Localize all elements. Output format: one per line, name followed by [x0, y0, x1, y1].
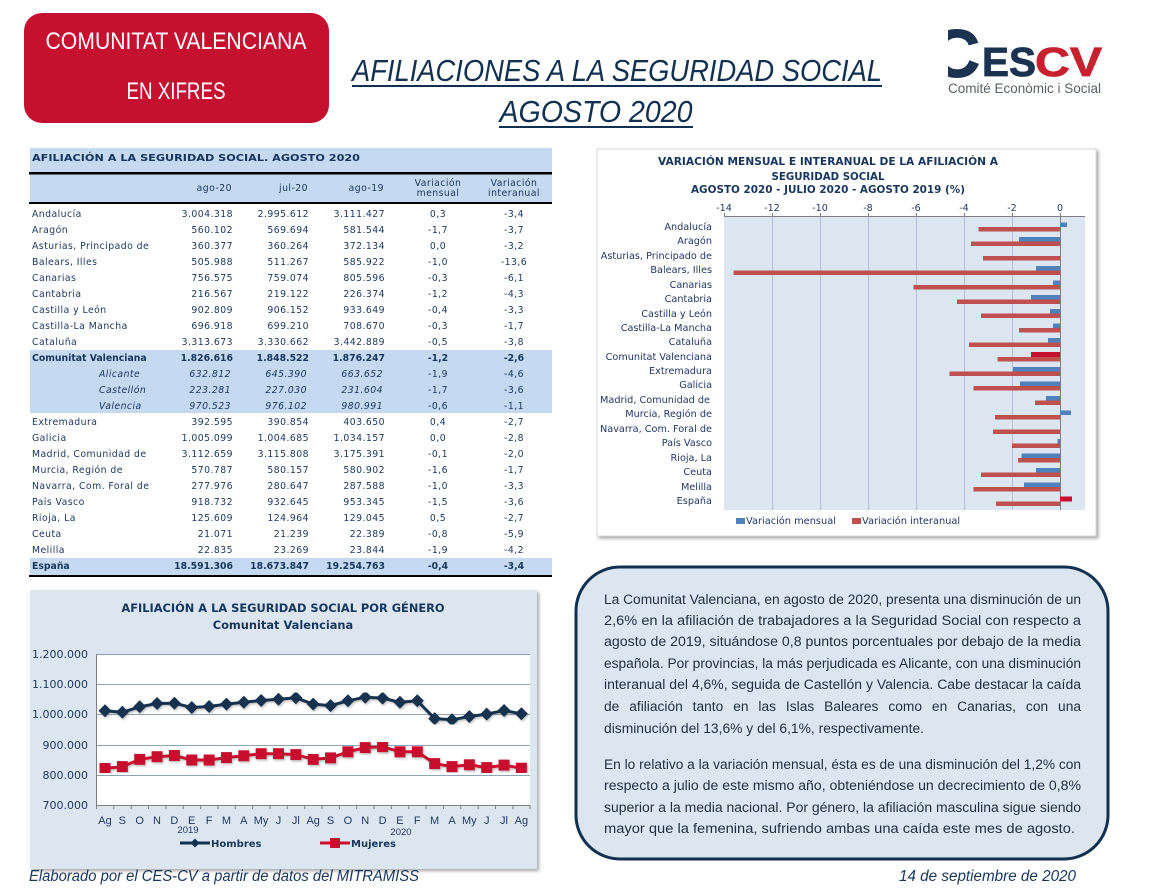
table rows: Alicante — [98, 369, 140, 380]
table rows: 280.647 — [267, 481, 309, 492]
bars: variación mensual — [1013, 222, 1071, 487]
table rows: 226.374 — [343, 289, 385, 300]
paragraph 2 — [604, 757, 1081, 836]
table rows: 1.876.247 — [333, 353, 385, 364]
table rows: España — [32, 561, 70, 572]
table rows: 125.609 — [191, 513, 233, 524]
x axis month labels: Jl — [292, 815, 300, 827]
x axis month labels: S — [327, 815, 334, 827]
paragraph 2: respecto a julio de este mismo año, obteniéndose un decrecimiento de 0,8% — [604, 778, 1081, 793]
table rows: 756.575 — [191, 273, 233, 284]
table rows: 390.854 — [267, 417, 309, 428]
table rows: 0,0 — [430, 433, 446, 444]
table rows: Aragón — [32, 225, 68, 236]
table rows: 372.134 — [343, 241, 385, 252]
table rows: Castellón — [99, 385, 146, 396]
table rows: -3,2 — [504, 241, 524, 252]
panel: line chart afiliación por género — [30, 590, 537, 869]
table rows: 1.004.685 — [258, 433, 309, 444]
table rows: 581.544 — [343, 225, 385, 236]
table rows: 3.112.659 — [182, 449, 233, 460]
table: afiliación por comunidad — [29, 148, 552, 577]
y axis labels — [32, 648, 88, 812]
category labels: Canarias — [670, 280, 712, 291]
table rows: 21.071 — [198, 529, 233, 540]
table rows: 906.152 — [267, 305, 309, 316]
table rows: 970.523 — [189, 401, 231, 412]
x axis month labels: M — [222, 815, 231, 827]
x axis month labels: My — [254, 815, 269, 827]
category labels: Cataluña — [669, 337, 712, 348]
bar chart legend: Variación interanual — [862, 515, 960, 527]
plot area and axis — [716, 203, 1085, 510]
table rows: 3.175.391 — [334, 449, 385, 460]
table rows: -1,6 — [428, 465, 448, 476]
table rows: 505.988 — [191, 257, 233, 268]
table rows: País Vasco — [32, 497, 85, 508]
x axis month labels: Ag — [306, 815, 320, 827]
bar chart title: AGOSTO 2020 - JULIO 2020 - AGOSTO 2019 (%) — [691, 184, 965, 196]
table rows: 124.964 — [267, 513, 309, 524]
table rows: 580.157 — [267, 465, 309, 476]
plot area and axis: -6 — [911, 203, 921, 214]
line: Hombres — [105, 697, 521, 720]
x axis month labels: F — [206, 815, 213, 827]
x axis month labels: E — [396, 815, 404, 827]
table rows: -1,9 — [428, 545, 448, 556]
table rows: -3,3 — [504, 481, 524, 492]
table rows: Cataluña — [32, 337, 77, 348]
category labels: País Vasco — [662, 437, 712, 449]
plot area and axis: -8 — [863, 203, 873, 214]
category labels: Castilla-La Mancha — [621, 323, 712, 334]
bar chart title: VARIACIÓN MENSUAL E INTERANUAL DE LA AFILIACIÓN A — [658, 155, 999, 168]
table rows: -2,7 — [504, 417, 524, 428]
table rows: 3.111.427 — [334, 209, 385, 220]
table rows: 360.377 — [191, 241, 233, 252]
title: AGOSTO 2020 — [498, 94, 692, 129]
table rows: 696.918 — [191, 321, 233, 332]
table rows: 976.102 — [265, 401, 307, 412]
table rows: -2,0 — [504, 449, 524, 460]
plot area and axis: -12 — [764, 203, 780, 214]
table rows: 708.670 — [343, 321, 385, 332]
table rows: Madrid, Comunidad de — [32, 449, 147, 460]
table rows: Navarra, Com. Foral de — [32, 481, 149, 492]
table rows: 0,4 — [430, 417, 446, 428]
table rows: -13,6 — [501, 257, 527, 268]
table rows: 932.645 — [267, 497, 309, 508]
table rows: Galicia — [32, 433, 67, 444]
paragraph 1 — [604, 592, 1082, 736]
table bottom rule — [29, 575, 552, 577]
category labels: Asturias, Principado de — [601, 251, 712, 262]
footer: date: 14 de septiembre de 2020 — [899, 868, 1076, 885]
x axis month labels: A — [240, 815, 248, 827]
paragraph 1: de afiliación tanto en las Islas Baleares como en Canarias, con una — [604, 699, 1081, 714]
table rows: 511.267 — [267, 257, 309, 268]
x axis month labels: Ag — [98, 815, 112, 827]
table column headers: Variación — [415, 178, 461, 189]
table rows: Cantabria — [32, 289, 81, 300]
table rows: -1,0 — [428, 257, 448, 268]
table rows: -2,7 — [504, 513, 524, 524]
table rows: 645.390 — [265, 369, 307, 380]
table rows: -4,3 — [504, 289, 524, 300]
bar chart title — [658, 155, 999, 196]
table rows: -1,7 — [428, 385, 448, 396]
y axis labels: 800.000 — [42, 769, 88, 782]
badge: Comunitat Valenciana en xifres: EN XIFRES — [126, 78, 226, 105]
table rows: 231.604 — [341, 385, 383, 396]
bar chart legend — [736, 515, 960, 527]
x axis year labels: 2020 — [390, 827, 412, 838]
table rows: Murcia, Región de — [32, 465, 123, 476]
line chart legend: Hombres — [211, 839, 262, 850]
table rows: -3,4 — [504, 209, 524, 220]
x axis month labels: M — [430, 815, 439, 827]
x axis month labels: O — [344, 815, 353, 827]
table rows: 569.694 — [267, 225, 309, 236]
table rows: 632.812 — [189, 369, 231, 380]
line chart legend — [180, 838, 396, 850]
table title band — [30, 148, 552, 172]
table rows: 129.045 — [343, 513, 385, 524]
table column headers: ago-19 — [349, 183, 384, 194]
paragraph 1: española. Por provincias, la más perjudicada es Alicante, con una disminución — [604, 656, 1081, 671]
table rows: 1.034.157 — [334, 433, 385, 444]
logo: CES CV: C — [931, 16, 980, 92]
category labels: Murcia, Región de — [625, 408, 712, 420]
table rows: 287.588 — [343, 481, 385, 492]
table rows: -1,5 — [428, 497, 448, 508]
table rows: 3.004.318 — [182, 209, 233, 220]
y axis labels: 1.200.000 — [32, 648, 88, 661]
table rows: -1,0 — [428, 481, 448, 492]
category labels: Balears, Illes — [650, 265, 712, 276]
plot area and axis: -14 — [716, 203, 732, 214]
line chart title: Comunitat Valenciana — [213, 618, 353, 632]
table rows: 277.976 — [191, 481, 233, 492]
table rows: -5,9 — [504, 529, 524, 540]
table rows: -0,3 — [428, 321, 448, 332]
table rows: 560.102 — [191, 225, 233, 236]
x axis month labels: S — [119, 815, 126, 827]
logo: CES CV — [925, 16, 1103, 96]
table rows: -0,6 — [428, 401, 448, 412]
table rows: -4,6 — [504, 369, 524, 380]
table rows: Balears, Illes — [32, 257, 97, 268]
table rows: Asturias, Principado de — [32, 241, 149, 252]
table rows: 19.254.763 — [326, 561, 385, 572]
table rows: 570.787 — [191, 465, 233, 476]
x axis month labels: J — [276, 815, 281, 827]
highlighted band: España — [30, 558, 552, 575]
table rows: 3.442.889 — [334, 337, 385, 348]
table rows: 3.115.808 — [258, 449, 309, 460]
x axis month labels: D — [379, 815, 387, 827]
table rows: 219.122 — [267, 289, 309, 300]
bars: variación interanual — [734, 227, 1060, 506]
table rows: 0,3 — [430, 209, 446, 220]
x axis month labels: E — [188, 815, 195, 827]
title: AFILIACIONES A LA SEGURIDAD SOCIAL — [350, 53, 882, 88]
x axis month labels: Jl — [500, 815, 508, 827]
table column headers: Variación — [491, 178, 537, 189]
table rows: 933.649 — [343, 305, 385, 316]
category labels — [600, 221, 712, 507]
logo: CES CV: Comité Econòmic i Social — [948, 81, 1101, 96]
x axis month labels: A — [448, 815, 456, 827]
table rows: 223.281 — [189, 385, 231, 396]
table rows: -2,8 — [504, 433, 524, 444]
table rows: Canarias — [32, 273, 76, 284]
table rows: -1,7 — [504, 465, 524, 476]
table rows: -0,4 — [428, 561, 449, 572]
plot area with gridlines — [96, 654, 530, 809]
table rows: 3.330.662 — [258, 337, 309, 348]
category labels: Comunitat Valenciana — [606, 352, 712, 363]
table rows: Melilla — [32, 545, 65, 556]
table column headers — [29, 172, 552, 204]
bar chart legend: Variación mensual — [746, 515, 836, 527]
table rows: 18.673.847 — [250, 561, 309, 572]
paragraph 1: interanual del 4,6%, seguida de Castellón y Valencia. Cabe destacar la caída — [604, 677, 1082, 692]
paragraph 2: mayor que la femenina, sufriendo ambas una caída este mes de agosto. — [604, 821, 1075, 836]
table rows: -3,6 — [504, 497, 524, 508]
table rows: -0,5 — [428, 337, 448, 348]
category labels: Rioja, La — [671, 453, 712, 464]
category labels: Melilla — [681, 482, 712, 493]
table rows: Extremadura — [32, 417, 97, 428]
table rows: 23.269 — [274, 545, 309, 556]
table rows: 18.591.306 — [174, 561, 233, 572]
title — [350, 53, 882, 129]
table rows: -3,7 — [504, 225, 524, 236]
x axis month labels: F — [414, 815, 421, 827]
y axis labels: 1.000.000 — [32, 708, 88, 721]
category labels: Aragón — [677, 235, 712, 247]
table rows: 805.596 — [343, 273, 385, 284]
table rows: 360.264 — [267, 241, 309, 252]
category labels: Madrid, Comunidad de — [600, 395, 710, 406]
paragraph 1: 2,6% en la afiliación de trabajadores a la Seguridad Social con respecto a — [604, 613, 1082, 628]
table rows: 918.732 — [191, 497, 233, 508]
table rows: 663.652 — [341, 369, 383, 380]
line chart legend: Mujeres — [351, 839, 396, 850]
table rows: 3.313.673 — [182, 337, 233, 348]
panel: bar chart variación mensual e interanual — [597, 149, 1096, 536]
badge: Comunitat Valenciana en xifres — [24, 13, 329, 123]
logo: CES CV: ES — [982, 39, 1036, 85]
table rows: -3,8 — [504, 337, 524, 348]
x axis month labels: N — [361, 815, 369, 827]
x axis year labels — [177, 825, 412, 838]
table rows: 1.848.522 — [257, 353, 309, 364]
table rows: 227.030 — [265, 385, 307, 396]
table rows: Ceuta — [32, 529, 62, 540]
table rows: 2.995.612 — [258, 209, 309, 220]
x axis month labels — [98, 815, 528, 827]
table rows: -0,3 — [428, 273, 448, 284]
table rows: Castilla-La Mancha — [32, 321, 128, 332]
table rows: Comunitat Valenciana — [32, 353, 147, 364]
table rows: 902.809 — [191, 305, 233, 316]
paragraph 2: superior a la media nacional. Por género, la afiliación masculina sigue siendo — [604, 800, 1081, 815]
badge: Comunitat Valenciana en xifres: COMUNITAT VALENCIANA — [46, 28, 306, 55]
paragraph 1: agosto de 2019, situándose 0,8 puntos porcentuales por debajo de la media — [604, 634, 1082, 649]
table rows: -1,7 — [428, 225, 448, 236]
category labels: Navarra, Com. Foral de — [600, 424, 712, 435]
table rows: 22.389 — [350, 529, 385, 540]
line: Mujeres — [105, 747, 521, 768]
table rows: 953.345 — [343, 497, 385, 508]
plot area and axis: -4 — [959, 203, 969, 214]
paragraph 2: En lo relativo a la variación mensual, ésta es de una disminución del 1,2% con — [604, 757, 1081, 772]
category labels: Cantabria — [665, 294, 712, 305]
y axis labels: 900.000 — [42, 739, 88, 752]
table rows: -0,4 — [428, 305, 448, 316]
table rows: 22.835 — [198, 545, 233, 556]
table rows: 216.567 — [191, 289, 233, 300]
bar chart title: SEGURIDAD SOCIAL — [772, 171, 885, 183]
table column headers: jul-20 — [278, 183, 308, 194]
table rows: -1,9 — [428, 369, 448, 380]
table rows: 21.239 — [274, 529, 309, 540]
plot area and axis: -2 — [1007, 203, 1017, 214]
table rows: 392.595 — [191, 417, 233, 428]
table rows: -1,2 — [428, 289, 448, 300]
table rows: 585.922 — [343, 257, 385, 268]
table rows: 1.005.099 — [182, 433, 233, 444]
table rows: 580.902 — [343, 465, 385, 476]
table rows: -3,3 — [504, 305, 524, 316]
highlighted band: Comunitat Valenciana — [30, 350, 552, 413]
plot area and axis: -10 — [812, 203, 828, 214]
table rows: 980.991 — [341, 401, 383, 412]
table rows: Valencia — [99, 401, 142, 412]
bars: highlighted mensual Comunitat Valenciana and España — [1031, 352, 1072, 502]
category labels: Castilla y León — [641, 308, 712, 320]
y axis labels: 1.100.000 — [32, 678, 88, 691]
table rows: 403.650 — [343, 417, 385, 428]
x axis month labels: My — [462, 815, 477, 827]
category labels: Galicia — [679, 380, 712, 391]
table rows: -1,7 — [504, 321, 524, 332]
table rows: -6,1 — [504, 273, 524, 284]
table rows: -4,2 — [504, 545, 524, 556]
x axis month labels: O — [135, 815, 144, 827]
table rows: -1,1 — [504, 401, 524, 412]
category labels: Extremadura — [649, 366, 712, 377]
x axis month labels: N — [153, 815, 161, 827]
logo: CES CV: CV — [1035, 39, 1103, 85]
line chart title: AFILIACIÓN A LA SEGURIDAD SOCIAL POR GÉNERO — [121, 600, 445, 615]
table rows: 759.074 — [267, 273, 309, 284]
category labels: España — [677, 496, 712, 507]
table rows: 0,5 — [430, 513, 446, 524]
paragraph 1: disminución del 13,6% y del 6,1%, respectivamente. — [604, 721, 924, 736]
table rows: 23.844 — [350, 545, 385, 556]
table rows: 1.826.616 — [181, 353, 233, 364]
table rows: Rioja, La — [32, 513, 76, 524]
category labels: Ceuta — [683, 467, 712, 478]
table title band: AFILIACIÓN A LA SEGURIDAD SOCIAL. AGOSTO 2020 — [32, 152, 361, 164]
table rows: 699.210 — [267, 321, 309, 332]
table rows: -0,8 — [428, 529, 448, 540]
table rows: -2,6 — [504, 353, 524, 364]
x axis month labels: D — [170, 815, 178, 827]
table rows: 0,0 — [430, 241, 446, 252]
line chart title — [121, 600, 445, 632]
table column headers: mensual — [417, 188, 459, 199]
table rows — [32, 209, 527, 572]
paragraph 1: La Comunitat Valenciana, en agosto de 2020, presenta una disminución de un — [604, 592, 1081, 607]
plot area and axis: 0 — [1057, 203, 1063, 214]
table rows: Andalucía — [32, 209, 82, 220]
x axis month labels: J — [484, 815, 489, 827]
x axis year labels: 2019 — [177, 825, 199, 836]
footer: source: Elaborado por el CES-CV a partir de datos del MITRAMISS — [29, 868, 420, 885]
x axis month labels: Ag — [515, 815, 528, 827]
y axis labels: 700.000 — [42, 799, 88, 812]
category labels: Andalucía — [664, 221, 712, 233]
table column headers: interanual — [488, 188, 540, 199]
panel: text commentary — [576, 567, 1108, 859]
table rows: -3,6 — [504, 385, 524, 396]
table rows: -0,1 — [428, 449, 448, 460]
table column headers: ago-20 — [197, 183, 232, 194]
table rows: -1,2 — [428, 353, 448, 364]
table rows: Castilla y León — [32, 305, 107, 316]
table rows: -3,4 — [504, 561, 525, 572]
